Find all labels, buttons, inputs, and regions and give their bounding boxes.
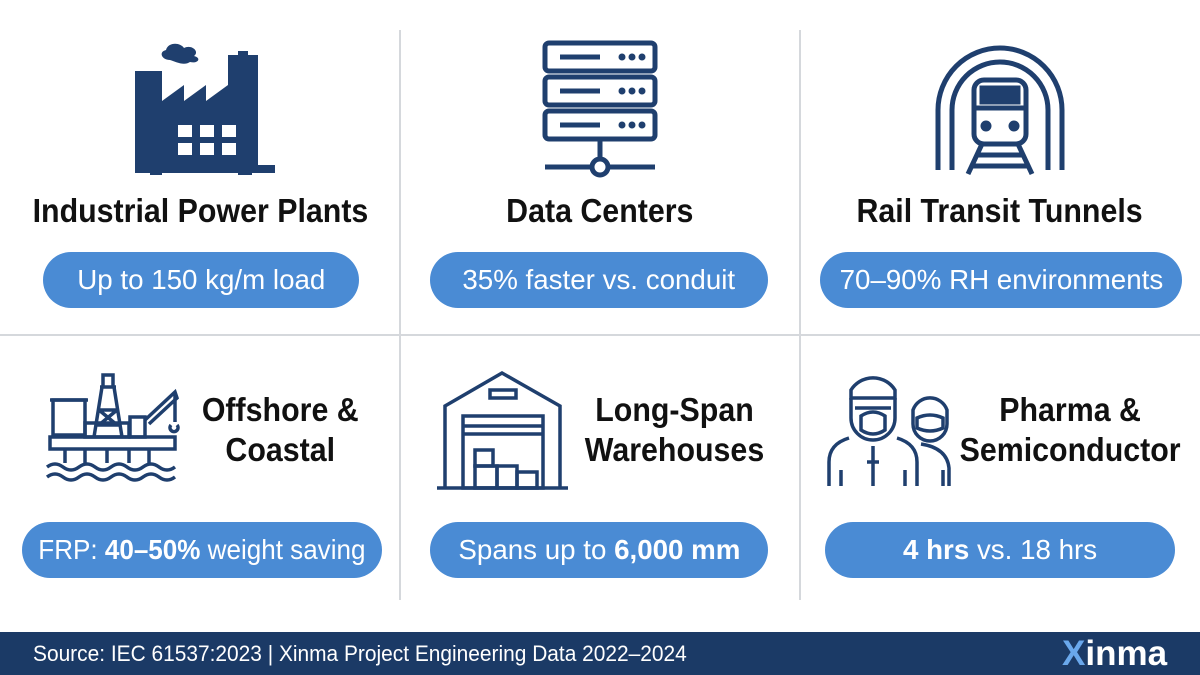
stat pill: 4 hrs vs. 18 hrs — [903, 534, 1097, 565]
stat pill — [430, 252, 768, 308]
heading — [584, 391, 765, 468]
footer — [0, 632, 1200, 675]
panel: industrial power plants — [32, 44, 368, 308]
heading: Data Centers — [506, 192, 694, 229]
heading: Warehouses — [585, 431, 765, 468]
panel: pharma & semiconductor — [825, 376, 1181, 578]
heading: Rail Transit Tunnels — [857, 192, 1143, 229]
stat pill — [430, 522, 768, 578]
stat pill — [43, 252, 359, 308]
icon: factory — [135, 44, 275, 175]
icon: train in tunnel — [936, 46, 1064, 175]
stat pill: 70–90% RH environments — [839, 264, 1163, 295]
stat pill: Up to 150 kg/m load — [77, 264, 325, 295]
icon: cleanroom workers — [827, 376, 951, 486]
stat pill — [825, 522, 1175, 578]
heading: Semiconductor — [960, 431, 1181, 468]
heading: Offshore & — [202, 391, 358, 428]
stat pill: FRP: 40–50% weight saving — [38, 534, 366, 565]
panel: rail transit tunnels — [820, 46, 1182, 308]
stat pill — [820, 252, 1182, 308]
source text: Source: IEC 61537:2023 | Xinma Project Engineering Data 2022–2024 — [33, 641, 687, 666]
stat pill — [22, 522, 382, 578]
heading: Pharma & — [1000, 391, 1141, 428]
heading — [960, 391, 1181, 468]
logo: Xinma — [1062, 634, 1167, 673]
icon: offshore rig — [46, 373, 180, 482]
heading — [202, 391, 358, 468]
heading: Industrial Power Plants — [32, 192, 368, 229]
heading: Long-Span — [596, 391, 754, 428]
stat pill: Spans up to 6,000 mm — [458, 534, 740, 565]
icon: server rack — [542, 40, 658, 178]
heading: Coastal — [225, 431, 335, 468]
panel: data centers — [430, 40, 768, 308]
stat pill: 35% faster vs. conduit — [463, 264, 735, 295]
icon: warehouse — [437, 371, 568, 490]
panel: long-span warehouses — [430, 371, 768, 578]
panel: offshore & coastal — [22, 373, 382, 578]
